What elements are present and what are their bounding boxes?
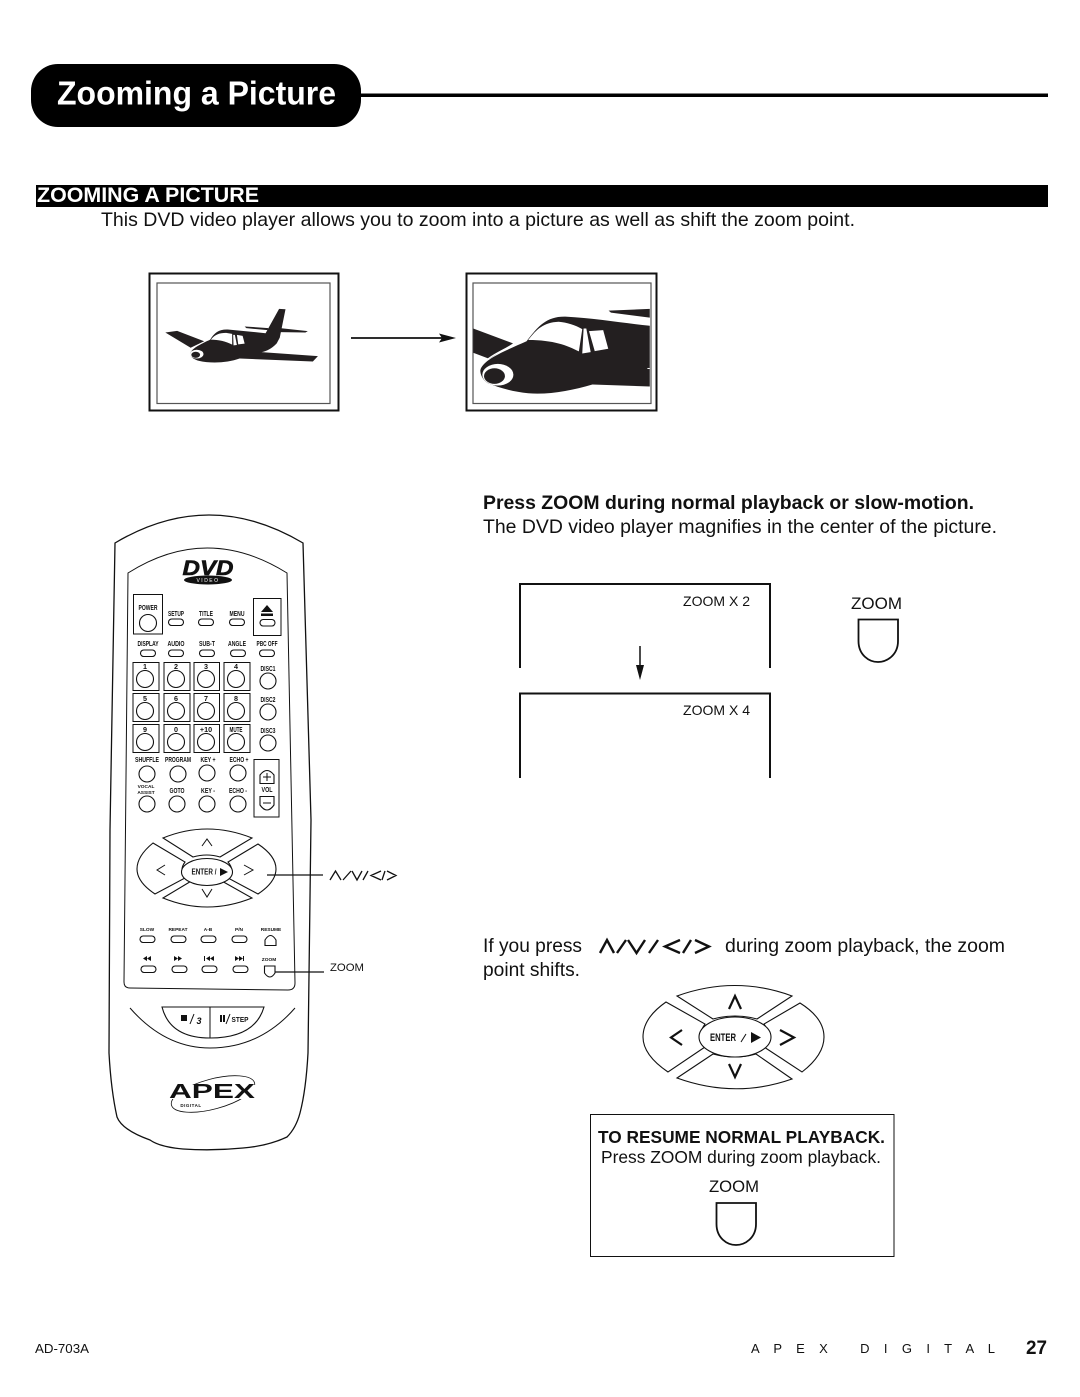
top buttons: TITLE [199,609,213,618]
screen: zoom x 4: ZOOM X 4 [683,702,750,718]
number keypad: 6 [174,694,178,703]
transport buttons: A-B [204,927,213,933]
top buttons: PBC OFF [256,639,278,648]
DVD logo: VIDEO [196,578,220,584]
number keypad: DISC3 [260,726,276,735]
remote control [109,515,311,1150]
instruction text: The DVD video player magnifies in the center of the picture. [483,516,997,538]
number keypad: 9 [143,725,147,734]
stop and step buttons: STEP [232,1015,249,1024]
function keys and volume: KEY + [200,755,216,764]
transport buttons: RESUME [261,927,282,933]
function keys and volume: VOCAL [138,784,154,790]
zoom button [851,594,902,662]
function keys and volume: GOTO [170,786,185,795]
arrow: zoom step [636,646,644,680]
stop and step buttons: 3 [196,1016,202,1026]
transport buttons: REPEAT [168,927,188,933]
header [31,64,1048,127]
number keypad: MUTE [230,725,243,734]
top buttons: SETUP [168,609,184,618]
top buttons [134,594,281,656]
enlarged navigation pad [643,986,824,1089]
function keys and volume [135,755,279,817]
resume heading: TO RESUME NORMAL PLAYBACK. [598,1127,885,1147]
callout: arrow keys [267,871,396,880]
footer [35,1338,1047,1359]
footer: 27 [1026,1338,1047,1359]
navigation pad: ENTER / [192,868,217,876]
APEX logo: APEX [169,1081,256,1103]
APEX logo: DIGITAL [180,1103,202,1108]
point shift text: point shifts. [483,959,580,981]
function keys and volume: SHUFFLE [135,755,159,764]
number keypad: 8 [234,694,238,703]
top buttons: AUDIO [168,639,185,648]
function keys and volume: ECHO + [230,755,248,764]
top buttons: SUB-T [199,639,215,648]
footer: AD-703A [35,1341,89,1356]
transport buttons [140,927,282,977]
number keypad: DISC2 [260,695,276,704]
top buttons: ANGLE [228,639,246,648]
remote body [109,515,311,1150]
top buttons: MENU [230,609,244,618]
instruction text [483,492,997,538]
picture: zoomed airplane [466,274,656,410]
resume zoom button [709,1177,759,1245]
stop and step buttons [130,1007,295,1048]
function keys and volume: PROGRAM [165,755,191,764]
DVD logo: DVD [182,557,234,580]
picture: normal airplane [150,274,338,410]
number keypad: 0 [174,725,178,734]
resume zoom button: ZOOM [709,1177,759,1196]
title: Zooming a Picture [57,76,336,112]
screen: zoom x 4 [520,694,770,778]
enlarged navigation pad: ENTER [710,1032,736,1044]
instruction text: Press ZOOM during normal playback or slow-motion. [483,492,974,514]
screen: zoom x 2 [520,584,770,668]
number keypad: +10 [200,725,212,734]
transport buttons: P/N [235,927,244,933]
top buttons: DISPLAY [138,639,159,648]
number keypad: 7 [204,694,208,703]
point shift text: during zoom playback, the zoom [725,935,1005,957]
panel: resume normal playback [590,1114,894,1256]
function keys and volume: ECHO - [229,786,247,795]
callout: zoom button: ZOOM [330,962,364,974]
transport buttons: SLOW [140,927,155,933]
arrow: zoom in [351,334,456,342]
number keypad: 2 [174,662,178,671]
point shift text: If you press [483,935,582,957]
number keypad: DISC1 [260,664,276,673]
point shift text [483,935,1005,981]
number keypad [133,662,276,752]
number keypad: 3 [204,662,208,671]
function keys and volume: KEY - [201,786,215,795]
intro text: This DVD video player allows you to zoom into a picture as well as shift the zoom point. [101,209,855,231]
APEX logo [168,1068,258,1120]
zoom button: ZOOM [851,594,902,613]
transport buttons: ZOOM [262,957,276,963]
navigation pad [137,829,276,907]
section heading: ZOOMING A PICTURE [37,184,259,207]
callout: zoom button [275,962,364,974]
resume instruction: Press ZOOM during zoom playback. [601,1147,881,1167]
top buttons: POWER [138,603,158,612]
function keys and volume: VOL [262,785,273,794]
number keypad: 4 [234,662,238,671]
screen: zoom x 2: ZOOM X 2 [683,593,750,609]
section heading [36,184,1048,207]
footer: A P E X D I G I T A L [751,1341,995,1356]
function keys and volume: ASSIST [137,790,155,796]
inner panel [124,548,295,990]
number keypad: 5 [143,694,147,703]
number keypad: 1 [143,662,147,671]
